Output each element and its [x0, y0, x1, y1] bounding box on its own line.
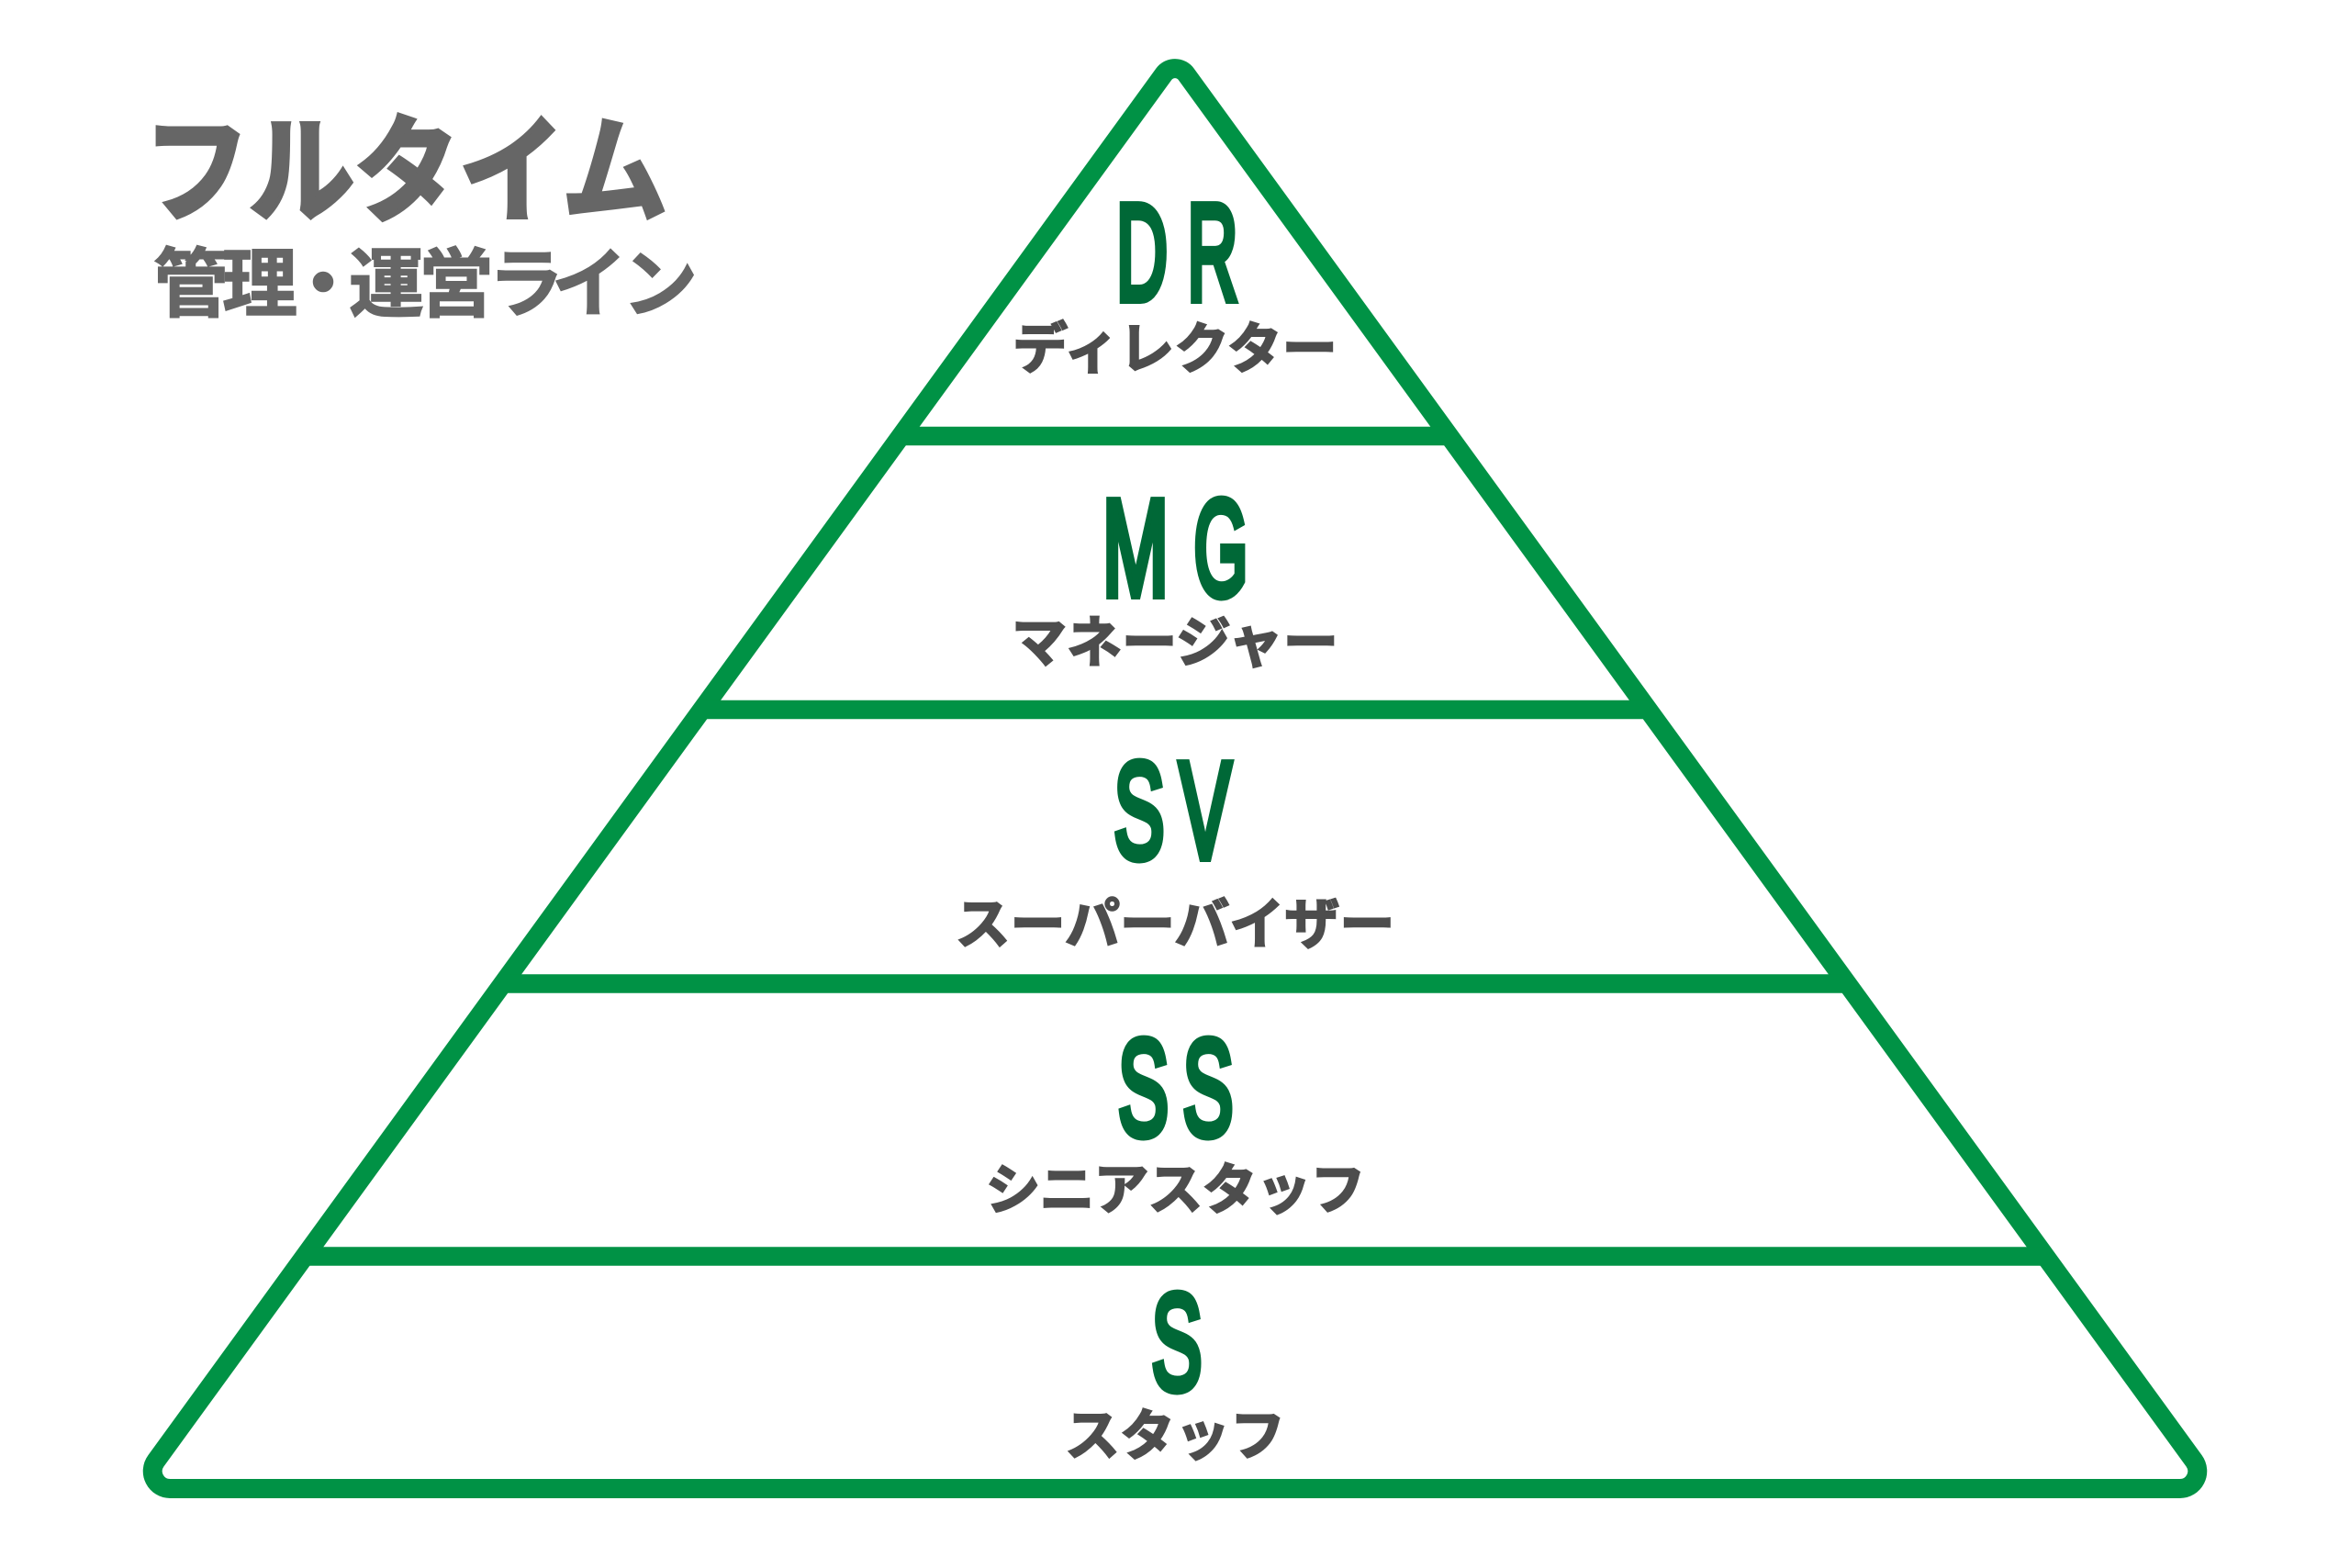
subtitle: management and operations line: 管理・運営ライン: [153, 243, 698, 327]
tier: supervisor: スーパーバイザー: [956, 894, 1394, 956]
tier: supervisor: V: [1180, 735, 1231, 887]
tier: supervisor: S: [1114, 735, 1164, 887]
tier: manager: マネージャー: [1012, 612, 1338, 674]
tier: director: R: [1188, 177, 1237, 329]
tier: staff: [1065, 1267, 1285, 1467]
tier: manager: G: [1193, 473, 1248, 624]
title: full-time: フルタイム: [144, 107, 667, 237]
tier: director: D: [1116, 177, 1168, 329]
tier: director: [1013, 177, 1337, 380]
tier: senior staff: S: [1118, 1013, 1169, 1164]
tier: director: ディレクター: [1013, 319, 1337, 380]
tier: staff: S: [1151, 1267, 1203, 1418]
tier: senior staff: シニアスタッフ: [986, 1159, 1364, 1221]
tier dividers: [305, 436, 2045, 1256]
tier: senior staff: [986, 1013, 1364, 1221]
tier: senior staff: S: [1182, 1013, 1234, 1164]
title block: [144, 107, 698, 327]
pyramid outline: [152, 69, 2198, 1489]
tier: supervisor: [956, 735, 1394, 956]
tier: manager: M: [1102, 473, 1169, 624]
pyramid: [152, 69, 2198, 1489]
tier: staff: スタッフ: [1065, 1406, 1285, 1467]
tier: manager: [1012, 473, 1338, 674]
